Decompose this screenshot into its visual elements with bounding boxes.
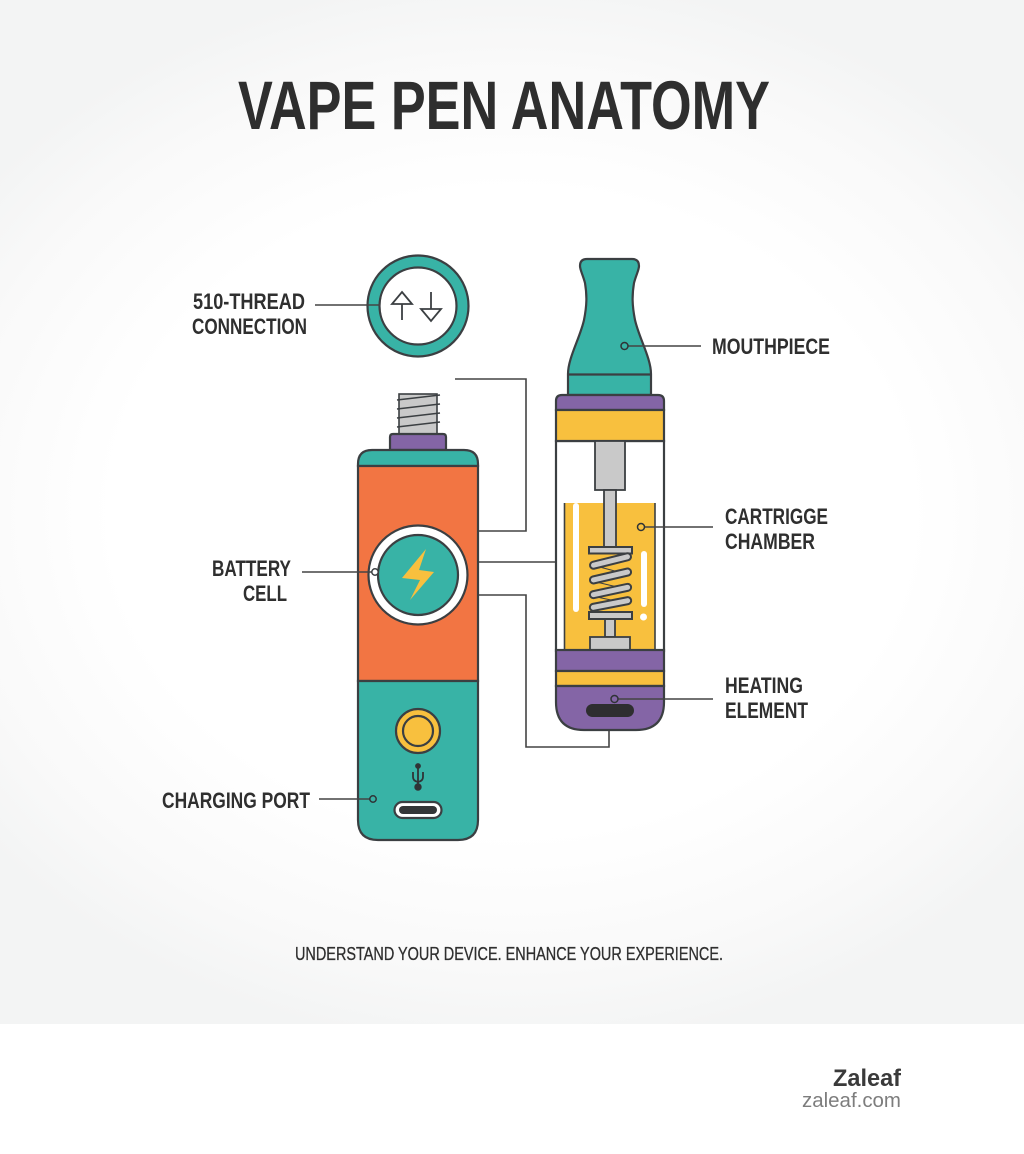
yellow collar: [556, 410, 664, 441]
callout: cartridge chamber: CARTRIGGE: [725, 504, 828, 529]
orange battery cell: [358, 466, 478, 681]
callout: 510-thread connection: [192, 289, 380, 339]
callout: heating element: [611, 673, 808, 723]
footer brand: [802, 1065, 902, 1112]
callout: battery cell: CELL: [243, 581, 287, 606]
callout: cartridge chamber: [638, 504, 828, 554]
teal lower body: [358, 681, 478, 840]
footer brand: zaleaf.com: [802, 1090, 901, 1112]
top purple cap: [556, 395, 664, 410]
usb-c port: [394, 802, 442, 818]
title: VAPE PEN ANATOMY: [238, 67, 770, 144]
lower yellow band: [556, 671, 664, 686]
icon: usb symbol: [413, 764, 423, 790]
tagline: UNDERSTAND YOUR DEVICE. ENHANCE YOUR EXPERIENCE.: [295, 943, 723, 964]
glass chamber: [556, 441, 664, 651]
inset: 510-thread connection ring: [368, 256, 468, 356]
purple collar: [390, 434, 446, 450]
air slot: [586, 704, 634, 717]
liquid: [564, 503, 656, 650]
central post: [590, 441, 630, 650]
battery badge: [368, 526, 468, 624]
heating coil: [589, 547, 632, 619]
callout: battery cell: BATTERY: [212, 556, 291, 581]
callout: heating element: ELEMENT: [725, 698, 808, 723]
button: [396, 709, 440, 753]
callout: 510-thread connection: 510-THREAD: [193, 289, 305, 314]
teal top cap: [358, 450, 478, 466]
callout: 510-thread connection: CONNECTION: [192, 314, 307, 339]
icon: lightning bolt: [402, 549, 434, 600]
callout: charging port: CHARGING PORT: [162, 788, 310, 813]
purple base: [556, 686, 664, 730]
callout: cartridge chamber: CHAMBER: [725, 529, 815, 554]
lower purple band: [556, 650, 664, 671]
highlights: [573, 503, 647, 620]
footer brand: Zaleaf: [833, 1065, 902, 1092]
threaded connector: [397, 394, 440, 435]
callout: battery cell: [212, 556, 378, 606]
mouthpiece: [568, 259, 651, 395]
connector lines between battery and cartridge: [455, 379, 609, 747]
callout: mouthpiece: [621, 334, 830, 359]
callout: mouthpiece: MOUTHPIECE: [712, 334, 830, 359]
callout: heating element: HEATING: [725, 673, 803, 698]
cartridge: [556, 259, 664, 730]
battery body: [358, 394, 478, 840]
